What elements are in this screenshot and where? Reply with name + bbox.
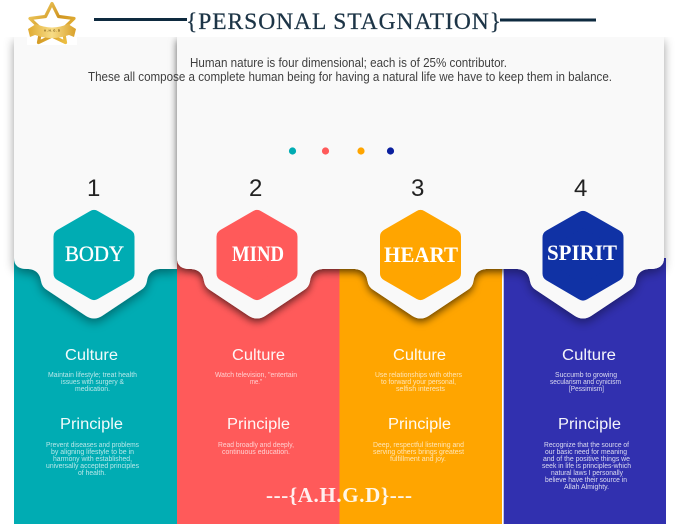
panel: column 2 mind: 2: [249, 175, 262, 202]
panel: column 1 body: harmony with established,: [53, 456, 132, 463]
text block: introduction: These all compose a complete human being for having a natural life we have to keep them in balance.: [88, 70, 612, 84]
icon: gold star badge: [27, 0, 77, 45]
background strip above the cards: [0, 24, 680, 37]
panel: column 3 heart: [373, 175, 464, 463]
panel: column 1 body: [46, 175, 139, 477]
panel: column 4 spirit: Culture: [562, 347, 616, 364]
panel: column 1 body: Prevent diseases and problems: [46, 442, 139, 449]
panel: column 1 body: BODY: [65, 241, 124, 266]
panel: column 4 spirit: Succumb to growing: [555, 372, 617, 379]
title: {PERSONAL STAGNATION}: [186, 9, 501, 35]
panel: column 1 body: universally accepted principles: [46, 463, 139, 470]
panel: column 1 body: by aligning lifestyle to be in: [51, 449, 134, 456]
panel: column 4 spirit: natural laws I personally: [551, 470, 623, 477]
footer signature: ---{A.H.G.D}---: [266, 483, 412, 507]
panel: column 2 mind: continuous education.: [222, 449, 290, 456]
icon: gold star badge: A.H.G.D: [44, 28, 60, 32]
panel: column 3 heart: Use relationships with others: [375, 372, 462, 379]
panel: column 4 spirit: [Pessimism]: [569, 386, 604, 393]
panel: column 4 spirit: 4: [574, 175, 587, 202]
panel: column 2 mind: Read broadly and deeply,: [218, 442, 294, 449]
panel: column 4 spirit: Principle: [558, 416, 621, 433]
panel: column 1 body: of health.: [78, 470, 106, 477]
text block: introduction: [88, 56, 612, 84]
panel: column 1 body: Principle: [60, 416, 123, 433]
panel: column 1 body: issues with surgery &: [61, 379, 124, 386]
panel: column 4 spirit: Allah Almighty.: [564, 484, 609, 491]
panel: column 2 mind: MIND: [232, 241, 284, 266]
panel: column 2 mind: Principle: [227, 416, 290, 433]
panel: column 2 mind: Culture: [232, 347, 285, 364]
text block: introduction: Human nature is four dimensional; each is of 25% contributor.: [190, 56, 507, 70]
panel: column 2 mind: Watch television, "entertain: [215, 372, 297, 379]
panel: column 3 heart: serving others brings greatest: [373, 449, 464, 456]
panel: column 2 mind: me.": [250, 379, 262, 386]
panel: column 1 body: medication.: [75, 386, 110, 393]
panel: column 3 heart: to forward your personal,: [381, 379, 456, 386]
panel: column 4 spirit: Recognize that the source of: [544, 442, 629, 449]
title: [94, 9, 596, 35]
panel: main white card with notches: [177, 37, 664, 318]
panel: column 4 spirit: secularism and cynicism: [550, 379, 621, 386]
panel: column 4 spirit: SPIRIT: [547, 240, 617, 265]
panel: column 1 body: Culture: [65, 347, 118, 364]
panel: column 3 heart: Deep, respectful listening and: [373, 442, 464, 449]
panel: column 4 spirit: seek in life is principles-which: [542, 463, 631, 470]
panel: column 4 spirit: [542, 175, 631, 491]
panel: left white card with notch: [14, 37, 177, 318]
panel: column 4 spirit: believe have their source in: [545, 477, 627, 484]
panel: column 4 spirit: and of the positive things we: [543, 456, 630, 463]
panel: coloured column bands: [14, 258, 666, 524]
legend dots: [289, 147, 394, 155]
panel: column 3 heart: fulfillment and joy.: [390, 456, 446, 463]
panel: column 3 heart: 3: [411, 175, 424, 202]
panel: column 3 heart: Principle: [388, 416, 451, 433]
panel: column 4 spirit: our basic need for meaning: [545, 449, 627, 456]
panel: column 3 heart: Culture: [393, 347, 446, 364]
panel: column 1 body: Maintain lifestyle; treat health: [48, 372, 137, 379]
panel: column 3 heart: HEART: [384, 242, 458, 267]
panel: column 3 heart: selfish interests: [396, 386, 445, 393]
panel: column 1 body: 1: [87, 175, 100, 202]
panel: column 2 mind: [215, 175, 297, 456]
